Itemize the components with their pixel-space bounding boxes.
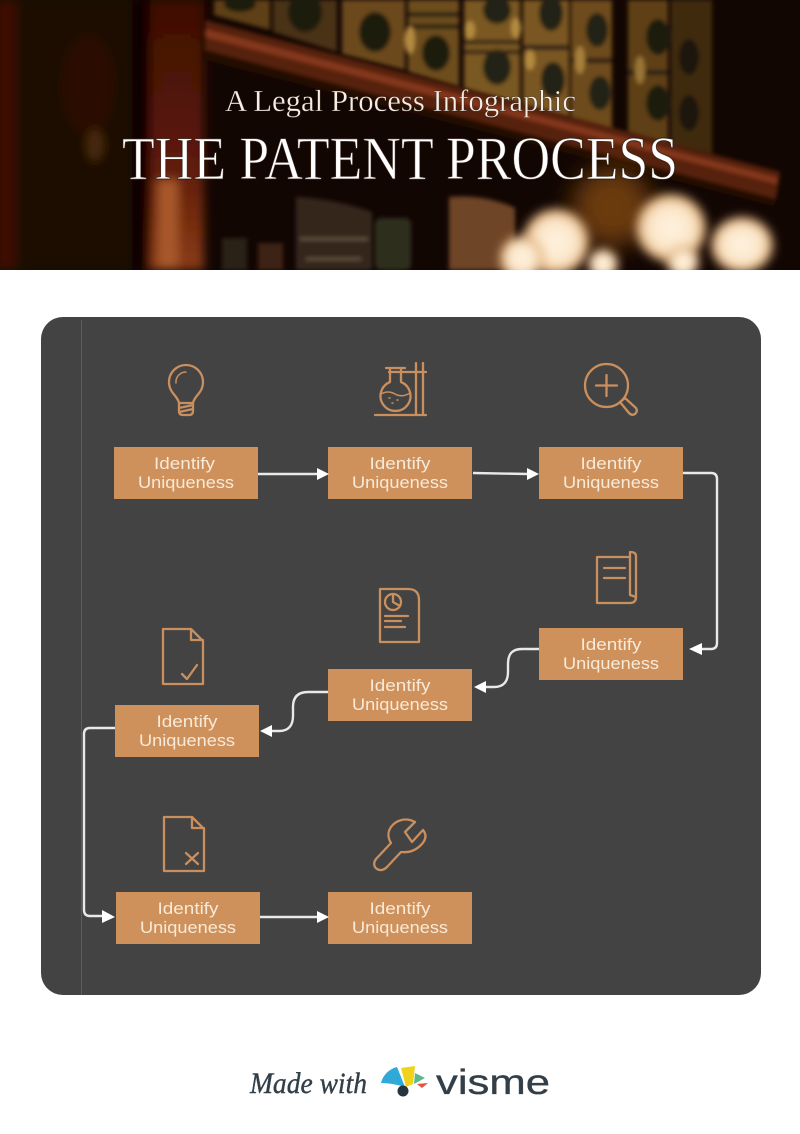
icon: magnifier with plus [585, 364, 637, 415]
step 1 box: Uniqueness [138, 474, 234, 492]
step 6 box: Uniqueness [139, 732, 235, 750]
arrow: step 6 to 7 [84, 728, 115, 923]
arrow: step 3 to 4 [683, 473, 717, 655]
step 8 box [328, 892, 472, 944]
icon: wrench [374, 820, 425, 870]
step 3 box: Identify [580, 455, 642, 473]
made with script text: Made with [249, 1067, 367, 1100]
step 5 box: Uniqueness [352, 696, 448, 714]
books on lower shelf [222, 196, 515, 270]
step 6 box: Identify [156, 713, 218, 731]
step 6 box [115, 705, 259, 757]
arrow: step 4 to 5 [474, 649, 539, 693]
panel: process flow [41, 317, 761, 995]
step 5 box [328, 669, 472, 721]
step 5 box: Identify [370, 677, 431, 695]
header photo: library bookshelf [0, 0, 800, 280]
step 2 box [328, 447, 472, 499]
visme wordmark: visme [436, 1063, 550, 1102]
step 8 box: Uniqueness [352, 919, 448, 937]
icon: book [597, 552, 636, 603]
bokeh lights [500, 167, 773, 280]
icon: document with check [163, 629, 203, 684]
arrow: step 2 to 3 [473, 468, 539, 480]
icon: document with cross [164, 817, 204, 871]
wooden shelf edge [205, 20, 780, 206]
books on upper shelf [214, 0, 712, 155]
arrow: step 1 to 2 [258, 468, 329, 480]
footer: made with visme [249, 1063, 550, 1102]
step 7 box: Uniqueness [140, 919, 236, 937]
step 4 box [539, 628, 683, 680]
icon: light bulb [169, 365, 203, 415]
icon: visme logo [381, 1066, 428, 1096]
arrow: step 7 to 8 [260, 911, 329, 923]
step 7 box [116, 892, 260, 944]
step 2 box: Identify [370, 455, 431, 473]
title: THE PATENT PROCESS [122, 126, 678, 193]
subtitle: A Legal Process Infographic [225, 83, 576, 118]
step 8 box: Identify [370, 900, 431, 918]
step 4 box: Uniqueness [563, 655, 659, 673]
step 7 box: Identify [158, 900, 219, 918]
step 1 box [114, 447, 258, 499]
step 1 box: Identify [154, 455, 216, 473]
step 2 box: Uniqueness [352, 474, 448, 492]
icon: flask on stand [375, 363, 426, 415]
icon: document with pie chart [380, 589, 419, 642]
step 3 box: Uniqueness [563, 474, 659, 492]
step 4 box: Identify [580, 636, 642, 654]
step 3 box [539, 447, 683, 499]
arrow: step 5 to 6 [260, 692, 328, 737]
